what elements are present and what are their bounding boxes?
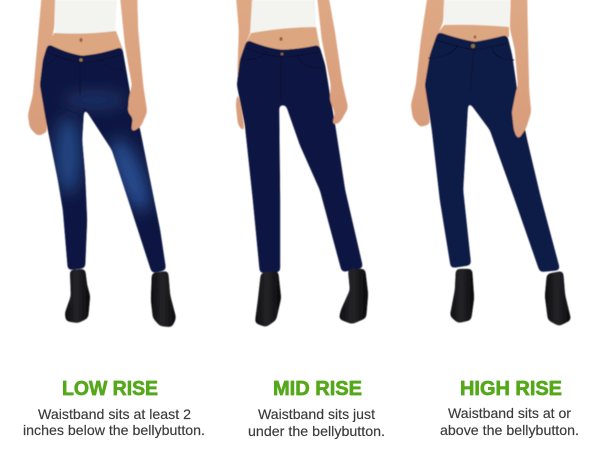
button	[281, 53, 283, 55]
right arm and hand	[317, 0, 348, 126]
white crop top	[55, 0, 117, 34]
caption: low rise	[23, 378, 205, 438]
heading: high rise: HIGH RISE	[460, 378, 562, 400]
caption: mid rise	[248, 378, 385, 439]
left arm	[411, 0, 444, 127]
button	[79, 58, 83, 62]
left boot	[255, 271, 281, 327]
figure: low rise jeans	[28, 0, 176, 327]
description: high rise: above the bellybutton.	[440, 422, 579, 438]
description: low rise: Waistband sits at least 2	[38, 406, 191, 422]
left boot	[65, 269, 90, 323]
waistband details	[428, 40, 514, 92]
belly button	[80, 38, 82, 42]
waistband details	[45, 52, 122, 95]
belly button	[474, 35, 476, 39]
right boot	[545, 271, 571, 326]
white crop top	[444, 0, 510, 27]
left arm	[28, 0, 55, 136]
right boot	[151, 271, 176, 327]
belly button	[280, 37, 282, 41]
description: mid rise	[248, 406, 385, 439]
description: high rise	[440, 405, 579, 438]
heading: mid rise: MID RISE	[273, 378, 362, 400]
heading: low rise: LOW RISE	[62, 378, 158, 400]
figure: high rise jeans	[411, 0, 571, 326]
right arm and hand	[510, 0, 531, 140]
belly skin	[47, 31, 123, 58]
waistband details	[242, 48, 322, 100]
description: mid rise: under the bellybutton.	[248, 423, 385, 439]
description: mid rise: Waistband sits just	[258, 406, 375, 422]
jeans	[237, 40, 363, 273]
left boot	[450, 269, 474, 323]
description: low rise: inches below the bellybutton.	[23, 422, 205, 438]
description: high rise: Waistband sits at or	[448, 405, 571, 421]
denim fades	[55, 92, 156, 215]
figure: mid rise jeans	[236, 0, 368, 327]
description: low rise	[23, 406, 205, 438]
belly skin	[246, 27, 320, 52]
jeans	[425, 32, 560, 272]
jeans	[40, 44, 166, 273]
right arm and hand	[120, 0, 147, 133]
right boot	[339, 269, 368, 324]
white crop top	[250, 0, 316, 33]
caption: high rise	[440, 378, 579, 438]
left arm	[236, 0, 253, 135]
belly skin	[437, 25, 509, 44]
button	[471, 44, 475, 48]
